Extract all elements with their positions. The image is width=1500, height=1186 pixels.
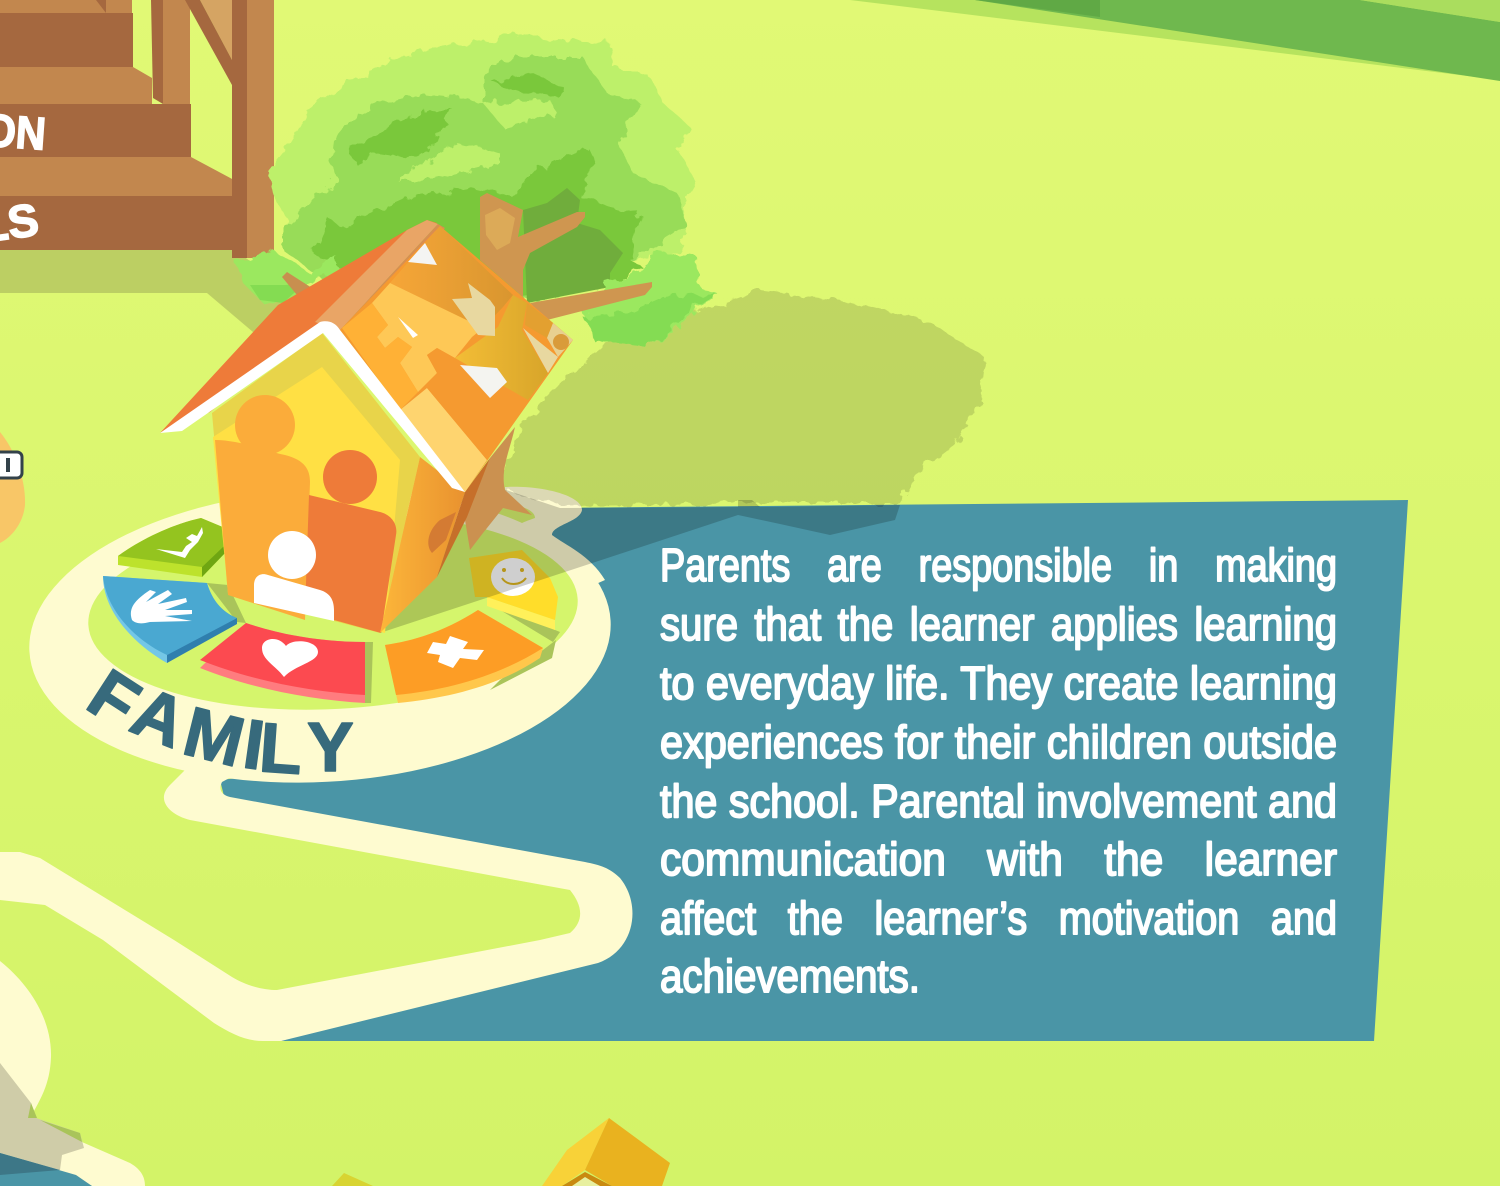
- paragraph text: Parents are responsible in making: [660, 539, 1337, 591]
- front wall inner: [213, 367, 400, 633]
- icon: heart: [262, 639, 318, 677]
- roof white trim: [160, 321, 465, 492]
- ring connector top right: [505, 487, 605, 600]
- segment: blue hand: [103, 576, 237, 663]
- second adult figure: [305, 450, 396, 633]
- paragraph text: sure that the learner applies learning: [660, 598, 1337, 650]
- small yellow cube: [332, 1173, 373, 1186]
- child figure: [254, 531, 334, 621]
- family label: FAMILY: [75, 654, 354, 789]
- lower left path blob: [0, 961, 51, 1118]
- branches: [480, 193, 585, 297]
- segment: red heart: [200, 623, 365, 703]
- paragraph text: experiences for their children outside: [660, 716, 1337, 768]
- character at left edge: [0, 432, 25, 543]
- roof right: [340, 226, 573, 492]
- cast shadow wedge: [380, 488, 738, 633]
- paragraph text: communication with the learner: [660, 833, 1337, 885]
- yellow cube bottom: [542, 1118, 670, 1186]
- paragraph text: achievements.: [660, 950, 920, 1002]
- segment: orange cross: [385, 610, 543, 703]
- segment: green plant: [118, 518, 225, 577]
- hill top right: [850, 0, 1500, 81]
- trunk lower: [465, 427, 532, 550]
- icon: plant: [156, 527, 203, 558]
- roof patches: [342, 226, 573, 492]
- paragraph text: the school. Parental involvement and: [660, 775, 1337, 827]
- icon: hand: [131, 590, 192, 623]
- paragraph text: [660, 539, 1337, 1002]
- ring base: [22, 475, 618, 797]
- shadow of stairs: [0, 250, 330, 332]
- paragraph text: affect the learner’s motivation and: [660, 892, 1337, 944]
- inner ring: [83, 502, 583, 722]
- icon: cross: [427, 636, 484, 668]
- segment: yellow smile: [469, 550, 558, 630]
- roof edge: [315, 220, 438, 330]
- house: [160, 220, 573, 633]
- winding path: [0, 740, 632, 1041]
- left bush: [237, 250, 337, 303]
- paragraph text: to everyday life. They create learning: [660, 657, 1337, 709]
- lower left rock shadow: [0, 1063, 84, 1170]
- side wall: [380, 457, 465, 633]
- icon: smile: [491, 558, 535, 596]
- segment shadows: [207, 583, 560, 703]
- right bush: [583, 250, 717, 347]
- roof window glints: [408, 243, 437, 265]
- front wall: [212, 333, 420, 633]
- canopy: [268, 32, 697, 303]
- lower left path band: [0, 1118, 145, 1186]
- tree: [237, 32, 717, 550]
- roof left: [160, 220, 437, 433]
- wheel segments: [103, 518, 560, 703]
- lower left water: [0, 1153, 92, 1186]
- wooden stairs: [0, 0, 274, 258]
- adult figure: [215, 395, 310, 620]
- tree shadow on panel: [738, 500, 900, 535]
- teal panel: [220, 500, 1408, 1041]
- tree shadow on lawn: [500, 290, 985, 505]
